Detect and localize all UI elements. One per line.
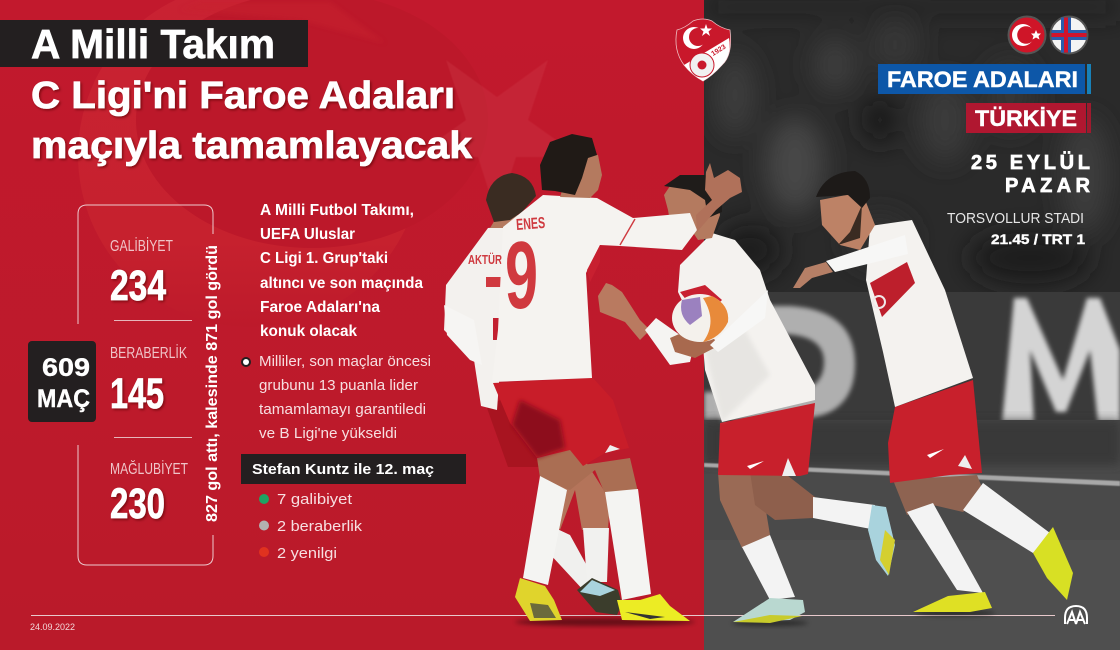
match date <box>971 151 1091 197</box>
title: C Ligi'ni Faroe Adaları <box>31 75 455 117</box>
text block: intro: konuk olacak <box>260 323 357 340</box>
stat: losses: 230 <box>110 480 165 528</box>
panel: match record bracket <box>78 205 213 565</box>
icon: AA logo <box>1065 606 1087 624</box>
text block: group leader note: grubunu 13 puanla lider <box>259 377 418 394</box>
title: maçıyla tamamlayacak <box>31 125 473 167</box>
divider line with date: 24.09.2022 <box>30 622 75 632</box>
label: Turkiye: TÜRKİYE <box>975 106 1077 131</box>
photo: player Akturk <box>444 173 622 615</box>
match ball <box>672 294 728 342</box>
match date: 25 EYLÜL <box>971 151 1090 174</box>
stat: draws: BERABERLİK <box>110 343 187 362</box>
icon: Faroe flag <box>1050 16 1088 54</box>
photo: player Enes number 9: 9 <box>505 222 538 329</box>
text block: intro: Faroe Adaları'na <box>260 299 380 316</box>
panel: stadium photo background <box>704 0 1120 650</box>
badge: 609 matches <box>28 341 96 422</box>
icon: TFF crest: 1923 <box>710 44 727 58</box>
text block: intro: altıncı ve son maçında <box>260 275 423 292</box>
flag star watermark <box>424 62 555 190</box>
photo: player four <box>793 171 1073 612</box>
title: A Milli Takım <box>31 21 275 67</box>
stat: draws <box>110 343 187 418</box>
text block: intro: C Ligi 1. Grup'taki <box>260 250 388 267</box>
photo: player Enes number 9: ENES <box>516 215 546 234</box>
stat: wins: GALİBİYET <box>110 236 173 255</box>
stat: draws: 145 <box>110 370 164 418</box>
advertising board <box>704 292 1120 422</box>
title <box>0 20 473 167</box>
text block: intro: A Milli Futbol Takımı, <box>260 202 414 219</box>
stat: wins: 234 <box>110 262 166 310</box>
list: Kuntz record <box>259 491 363 562</box>
crowd <box>712 26 1113 285</box>
badge: 609 matches: MAÇ <box>37 385 90 413</box>
pitch <box>704 420 1120 650</box>
list item: wins: 7 galibiyet <box>277 491 353 508</box>
photo: player Enes number 9 <box>492 134 742 621</box>
match date: PAZAR <box>1005 175 1091 197</box>
photo: player Akturk: AKTÜR <box>468 252 502 267</box>
vertical goals text: 827 gol attı, kalesinde 871 gol gördü <box>204 245 221 522</box>
text block: intro: UEFA Uluslar <box>260 226 355 243</box>
kickoff time and channel: 21.45 / TRT 1 <box>991 232 1086 247</box>
photo: player holding the ball <box>598 175 895 623</box>
player shadows <box>515 610 995 626</box>
list item: losses: 2 yenilgi <box>277 545 337 562</box>
label: Turkiye <box>966 103 1091 133</box>
stat: losses: MAĞLUBİYET <box>110 459 188 478</box>
icon: bullet <box>241 357 251 367</box>
flag crescent watermark <box>79 0 249 170</box>
text block: group leader note: ve B Ligi'ne yükseldi <box>259 425 397 442</box>
stat: losses <box>110 459 188 528</box>
text block: intro <box>260 202 423 340</box>
panel: red background <box>0 0 704 650</box>
icon: TFF crest <box>676 19 731 81</box>
text block: group leader note <box>259 353 431 442</box>
stat: wins <box>110 236 173 310</box>
text block: group leader note: Milliler, son maçlar öncesi <box>259 353 431 370</box>
heading: Stefan Kuntz: Stefan Kuntz ile 12. maç <box>252 461 434 478</box>
badge: 609 matches: 609 <box>42 354 90 382</box>
list item: draws: 2 beraberlik <box>277 518 363 535</box>
venue: TORSVOLLUR STADI <box>947 211 1084 227</box>
text block: group leader note: tamamlamayı garantiledi <box>259 401 426 418</box>
heading: Stefan Kuntz <box>241 454 466 484</box>
label: Faroe Adalari: FAROE ADALARI <box>887 67 1078 92</box>
icon: Turkish flag <box>1008 16 1046 54</box>
